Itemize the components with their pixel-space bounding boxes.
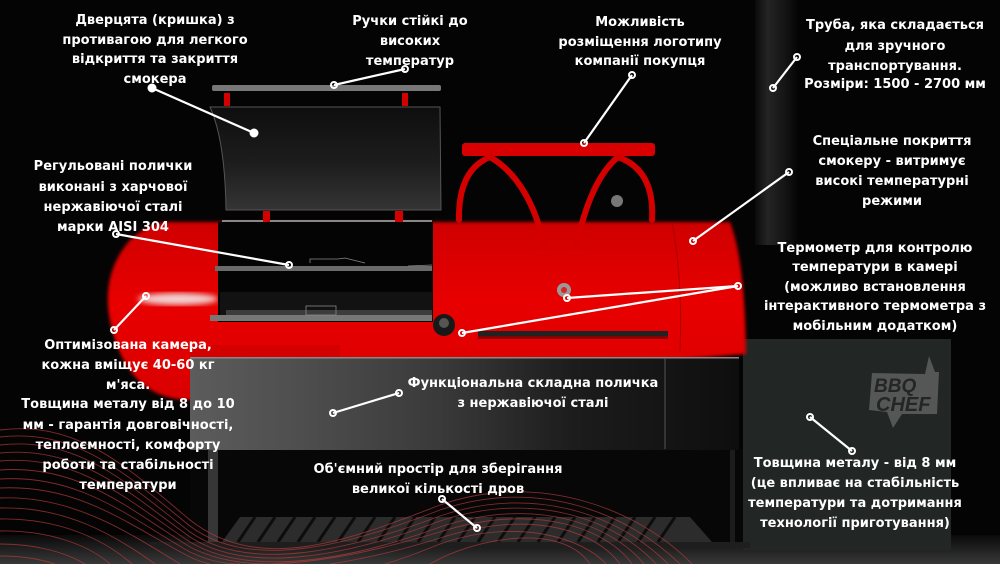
text: lid: противагою для легкого (62, 33, 248, 48)
text: thermometer: температури в камері (792, 260, 958, 275)
text: thermometer (764, 241, 986, 334)
cooking chamber opening (210, 220, 433, 322)
text: lid: Дверцята (кришка) з (75, 13, 235, 28)
text: handles: високих (380, 34, 441, 49)
text: wood storage: Об'ємний простір для зберігання (314, 462, 562, 477)
text: chamber: теплоємності, комфорту (36, 438, 221, 453)
line: metal thickness (807, 414, 855, 454)
text: coating: режими (862, 194, 922, 209)
firebox logo: CHEF (876, 394, 931, 416)
text: coating (813, 134, 971, 209)
text: shelves: нержавіючої сталі (44, 200, 182, 215)
text: shelves: виконані з харчової (39, 180, 188, 195)
text: coating: Спеціальне покриття (813, 134, 971, 149)
text: thermometer: інтерактивного термометра з (764, 299, 986, 314)
callout lines (111, 54, 855, 531)
smoker red body (108, 222, 746, 400)
text: chamber: Оптимізована камера, (44, 338, 212, 353)
lid handle (212, 85, 441, 91)
text: thermometer: мобільним додатком) (793, 319, 957, 334)
line: folding shelf (330, 390, 402, 416)
text: chimney: транспортування. (828, 59, 962, 74)
text: metal thickness: (це впливає на стабільність (751, 476, 959, 491)
lid bolts (224, 93, 408, 222)
line: thermometer (459, 283, 741, 336)
thermometer (557, 283, 571, 297)
text: shelves: марки AISI 304 (57, 220, 169, 235)
text: chimney (804, 18, 986, 92)
raised lid (210, 85, 441, 222)
text: folding shelf: Функціональна складна поличка (408, 376, 658, 391)
text: metal thickness: Товщина металу - від 8 мм (754, 456, 956, 471)
text: logo placement: Можливість (595, 15, 685, 30)
text: coating: смокеру - витримує (818, 154, 966, 169)
text: chamber: роботи та стабільності (42, 458, 214, 473)
firebox logo: BBQ (874, 376, 916, 397)
text: lid: смокера (124, 72, 186, 87)
text: chamber: температури (79, 478, 177, 493)
line: coating (690, 169, 792, 244)
red top handles (459, 143, 655, 248)
text: chimney: Труба, яка складається (806, 18, 984, 33)
text: lid: відкриття та закриття (72, 52, 238, 67)
line: handles (331, 66, 408, 88)
smoker lower storage (150, 450, 750, 548)
line: shelves (113, 231, 292, 268)
smoker firebox (743, 339, 951, 550)
folding stainless shelf (190, 357, 739, 450)
left highlight (138, 293, 218, 305)
firebox logo (869, 356, 939, 428)
text: chamber: Товщина металу від 8 до 10 (21, 397, 235, 412)
line: lid (148, 84, 258, 136)
text: lid (62, 13, 248, 87)
text: handles: температур (366, 54, 454, 69)
lower shelf (210, 315, 432, 321)
floor (0, 535, 1000, 564)
text: shelves: Регульовані полички (34, 159, 192, 174)
text: metal thickness (748, 456, 962, 531)
text: folding shelf (408, 376, 658, 411)
upper shelf (215, 266, 432, 271)
front rod handle (478, 331, 668, 336)
text: metal thickness: технології приготування) (760, 516, 950, 531)
text: chimney: для зручного (845, 39, 945, 54)
line: chamber (111, 293, 149, 333)
text: logo placement: компанії покупця (575, 54, 705, 69)
line: chimney (770, 54, 800, 91)
text: wood storage (314, 462, 562, 497)
text: chamber: м'яса. (106, 378, 150, 393)
chimney pipe (755, 0, 797, 245)
text: chamber: мм - гарантія довговічності, (23, 418, 233, 433)
text: chimney: Розміри: 1500 - 2700 мм (804, 77, 986, 92)
text: handles: Ручки стійкі до (352, 14, 468, 29)
text: handles (352, 14, 468, 69)
line: wood storage (439, 496, 480, 531)
text: chamber: кожна вміщує 40-60 кг (41, 358, 215, 373)
text: logo placement: розміщення логотипу (558, 35, 722, 50)
text: thermometer: (можливо встановлення (784, 280, 966, 295)
text: folding shelf: з нержавіючої сталі (457, 396, 609, 411)
text: coating: високі температурні (815, 174, 969, 189)
damper knob (433, 314, 455, 336)
text: logo placement (558, 15, 722, 69)
text: chamber (21, 338, 235, 493)
text: shelves (34, 159, 192, 235)
body end seam (672, 222, 681, 352)
line: logo (581, 72, 635, 146)
text: thermometer: Термометр для контролю (778, 241, 973, 256)
text: wood storage: великої кількості дров (352, 482, 524, 497)
text: metal thickness: температури та дотримання (748, 496, 962, 511)
decorative red wave lines (0, 429, 692, 564)
